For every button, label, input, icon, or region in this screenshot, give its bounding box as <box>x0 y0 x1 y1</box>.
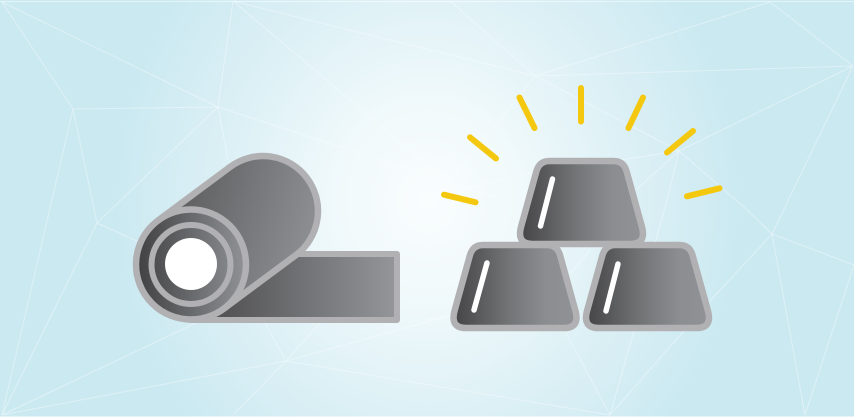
flat steel strip <box>190 254 397 320</box>
roll front face <box>136 210 246 320</box>
icon: steel roll <box>136 156 397 320</box>
roll core hole <box>165 238 217 290</box>
icon: stacked metal bars <box>454 161 709 328</box>
roll inner ring <box>152 225 230 304</box>
bottom right bar <box>586 245 709 328</box>
top bar <box>520 161 643 244</box>
icon: yellow shine rays <box>444 88 720 202</box>
roll cylinder body <box>158 156 318 308</box>
bottom left bar <box>454 245 576 328</box>
